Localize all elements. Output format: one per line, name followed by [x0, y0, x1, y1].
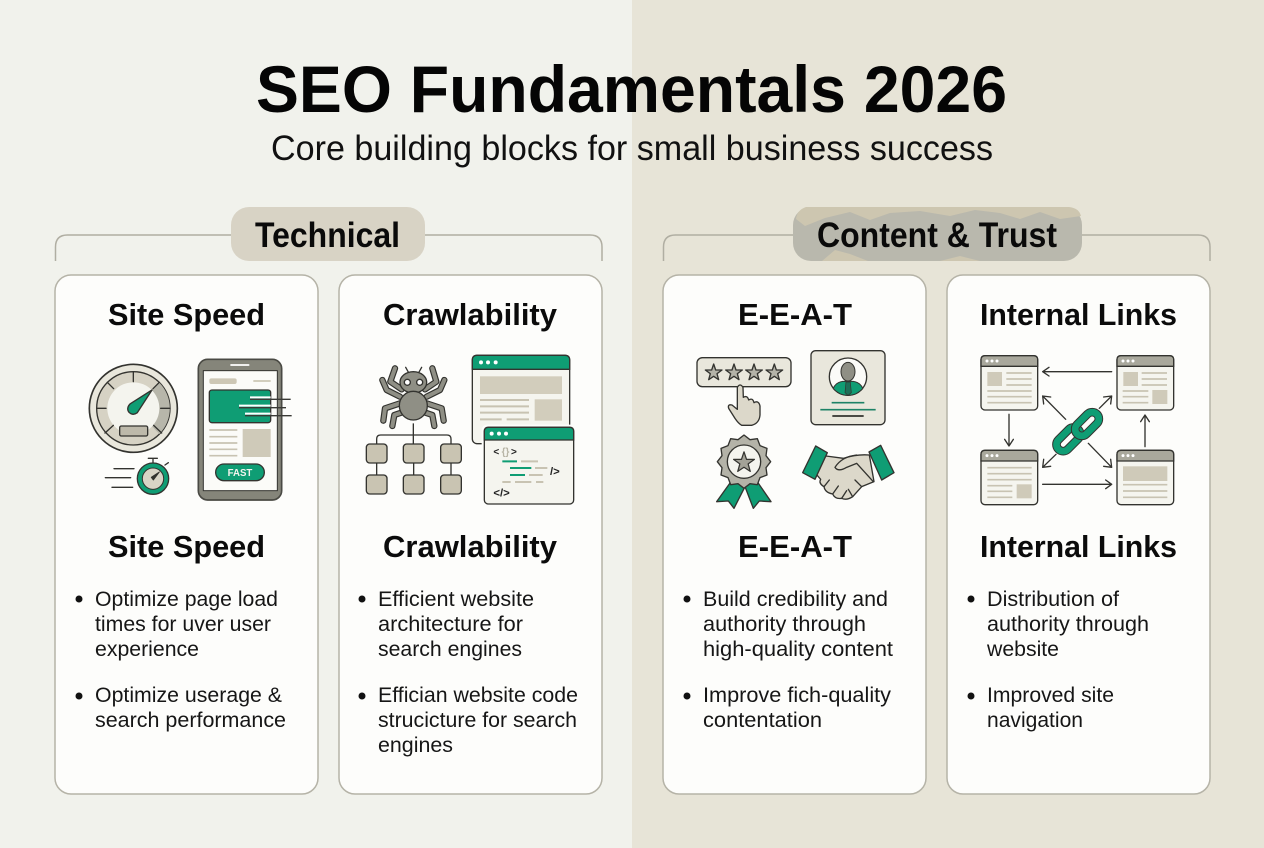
background: left half [0, 0, 632, 848]
card heading: Site Speed: Site Speed [108, 297, 265, 332]
section: Technical [56, 207, 602, 261]
card heading: E-E-A-T: E-E-A-T [738, 297, 852, 332]
bullet list: E-E-A-T: authority through [703, 612, 866, 636]
bullet list: E-E-A-T: Improve fich-quality [703, 683, 891, 707]
icon: spider, site tree and browser windows: > [511, 447, 517, 458]
bullet list: Crawlability: Efficient website [378, 587, 534, 611]
bullet list: Internal Links: website [986, 637, 1059, 661]
bullet list: Site Speed: search performance [95, 708, 286, 732]
panel: Crawlability [339, 275, 602, 794]
icon: star rating, profile card, award badge and handshake [697, 351, 894, 508]
card heading: Internal Links: Internal Links [980, 297, 1177, 332]
icon: spider, site tree and browser windows: </> [493, 488, 510, 500]
card heading: Crawlability: Crawlability [383, 297, 558, 332]
background: right half [632, 0, 1264, 848]
bullet list: E-E-A-T: contentation [703, 708, 822, 732]
icon: speedometer, stopwatch and fast phone: FAST [228, 468, 252, 479]
card subheading: E-E-A-T: E-E-A-T [738, 529, 852, 564]
icon: spider, site tree and browser windows [366, 355, 576, 507]
bullet list: Site Speed: times for uver user [95, 612, 271, 636]
panel: Site Speed [55, 275, 318, 794]
icon: speedometer, stopwatch and fast phone [89, 359, 292, 500]
bullet list: Internal Links: Improved site [987, 683, 1114, 707]
bullet list: Internal Links: navigation [987, 708, 1083, 732]
card subheading: Internal Links: Internal Links [980, 529, 1177, 564]
icon: spider, site tree and browser windows: < [493, 447, 499, 458]
bullet list: Crawlability: search engines [378, 637, 522, 661]
icon: spider, site tree and browser windows: {} [502, 447, 510, 458]
section pill: Technical [231, 207, 425, 261]
bullet list: Crawlability: strucicture for search [378, 708, 577, 732]
section pill: Technical: Technical [255, 216, 400, 255]
section pill: Content & Trust [793, 207, 1082, 261]
bullet list: Crawlability: engines [378, 733, 453, 757]
panel: E-E-A-T [663, 275, 926, 794]
bullet list: Site Speed [76, 587, 286, 732]
bullet list: Site Speed: Optimize userage & [95, 683, 282, 707]
bullet list: E-E-A-T: high-quality content [703, 637, 893, 661]
bullet list: Site Speed: Optimize page load [95, 587, 278, 611]
section pill: Content & Trust: Content & Trust [817, 216, 1057, 255]
icon: linked pages with chain and arrows [981, 356, 1174, 505]
subtitle: Core building blocks for small business success [271, 129, 993, 168]
title: SEO Fundamentals 2026 [256, 52, 1007, 126]
bullet list: Internal Links [968, 587, 1149, 732]
icon: spider, site tree and browser windows: /> [550, 466, 560, 478]
bullet list: E-E-A-T [684, 587, 893, 732]
card subheading: Crawlability: Crawlability [383, 529, 558, 564]
section: Content & Trust [664, 207, 1210, 261]
bullet list: Crawlability: Effician website code [378, 683, 578, 707]
panel: Internal Links [947, 275, 1210, 794]
bullet list: Site Speed: experience [95, 637, 199, 661]
bullet list: Crawlability [358, 587, 578, 757]
bullet list: Internal Links: Distribution of [987, 587, 1119, 611]
bullet list: E-E-A-T: Build credibility and [703, 587, 888, 611]
bullet list: Crawlability: architecture for [378, 612, 523, 636]
bullet list: Internal Links: authority through [987, 612, 1149, 636]
card subheading: Site Speed: Site Speed [108, 529, 265, 564]
